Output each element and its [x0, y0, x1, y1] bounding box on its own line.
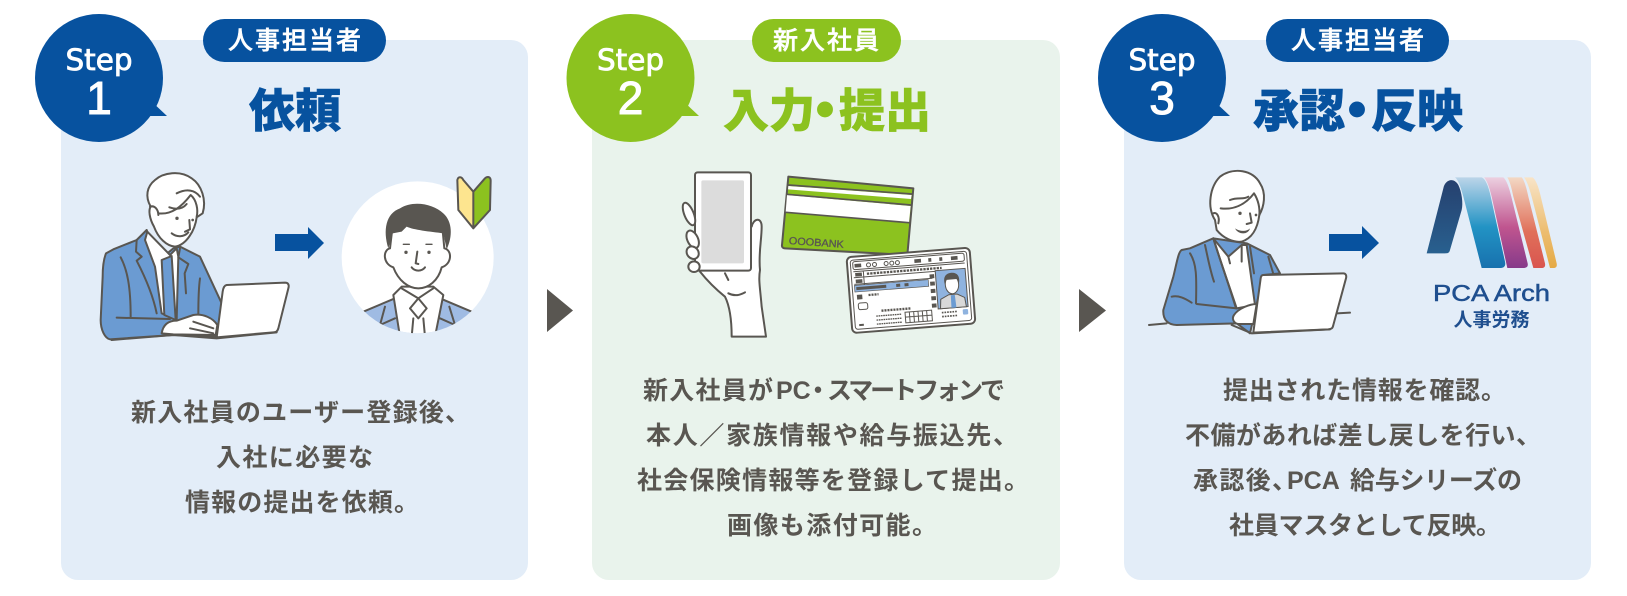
step 1 description: 情報の提出を依頼。 [185, 489, 419, 517]
logo text [1433, 280, 1550, 331]
step 1 badge: 1 [86, 72, 112, 124]
step 3 role pill [1266, 19, 1449, 62]
illustration: man at laptop [101, 173, 289, 340]
logo: PCA Arch [1427, 177, 1557, 268]
logo text: 人事労務 [1453, 309, 1530, 331]
illustration: bank card: OOOBANK [788, 236, 844, 251]
step 1 description: 入社に必要な [216, 444, 373, 472]
step 3 description: PCA [1287, 467, 1340, 495]
step 2 description: 社会保険情報等を登録して提出。 [637, 467, 1029, 495]
step 3 badge: 3 [1149, 72, 1175, 124]
illustration: bank card [782, 177, 913, 255]
step 3 description: 社員マスタとして反映。 [1229, 512, 1501, 540]
step 2 heading: 提出 [839, 85, 931, 137]
panel: step 1 background [61, 40, 528, 580]
step 2 badge: Step [597, 43, 664, 77]
illustration: new employee in circle with beginner mark [342, 177, 494, 337]
step 3 badge [1098, 14, 1230, 142]
flow arrow: step 2 to 3 [1079, 289, 1106, 332]
illustration: HR staff at laptop [1149, 171, 1350, 333]
step 2 heading: ・ [802, 85, 848, 137]
step 2 description: 新入社員が [643, 376, 773, 405]
step 1 badge [35, 14, 167, 142]
panel: step 2 background [592, 40, 1060, 580]
step 3 heading: 承認 [1253, 85, 1345, 137]
step 2 role pill [752, 19, 901, 62]
step 2 description: ・ [805, 377, 831, 405]
step 2 badge: 2 [618, 72, 643, 124]
logo text: PCA Arch [1433, 280, 1550, 306]
arrow: step 1 [275, 227, 324, 259]
step 2 description: PC [776, 377, 811, 405]
step 1 description [131, 399, 470, 517]
step 2 heading [723, 85, 931, 137]
illustration: driver's license card [847, 248, 975, 333]
step 3 description: 提出された情報を確認。 [1223, 377, 1506, 405]
step 1 role pill [203, 19, 386, 62]
step 3 role pill: 人事担当者 [1291, 27, 1426, 55]
arrow: step 3 [1329, 226, 1379, 259]
step 1 heading: 依頼 [249, 85, 341, 137]
step 3 heading: ・ [1334, 85, 1380, 137]
flow arrow: step 1 to 2 [547, 289, 573, 332]
step 3 description: 給与シリーズの [1350, 466, 1522, 495]
step 3 description: 不備があれば差し戻しを行い、 [1185, 421, 1541, 450]
panel: step 3 background [1124, 40, 1591, 580]
step 1 role pill: 人事担当者 [228, 27, 363, 55]
step 1 description: 新入社員のユーザー登録後、 [131, 399, 470, 427]
step 2 role pill: 新入社員 [773, 27, 881, 55]
step 2 heading: 入力 [723, 85, 815, 137]
step 2 badge [566, 14, 699, 142]
step 2 description: 画像も添付可能。 [727, 512, 937, 540]
step 3 description [1185, 377, 1541, 540]
step 3 heading: 反映 [1371, 85, 1463, 137]
step 2 description: 本人／家族情報や給与振込先、 [646, 422, 1018, 450]
step 3 description: 承認後、 [1193, 467, 1297, 495]
step 3 badge: Step [1128, 43, 1196, 77]
illustration: hand holding smartphone [680, 172, 766, 337]
step 3 heading [1253, 85, 1463, 137]
step 2 description: スマートフォンで [827, 377, 1005, 405]
step 1 badge: Step [66, 43, 132, 77]
step 2 description [637, 376, 1029, 540]
